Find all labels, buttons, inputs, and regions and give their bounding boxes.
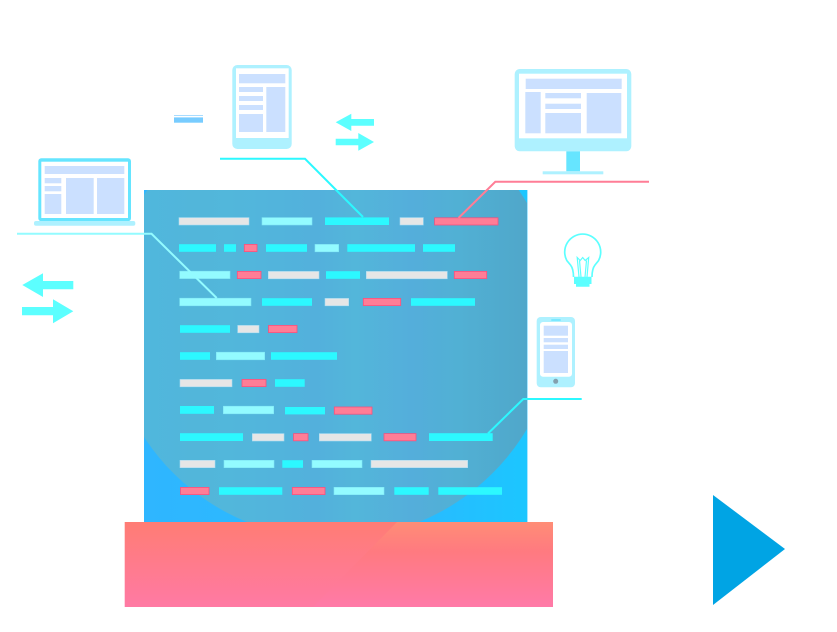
connector: monitor [458,182,649,218]
infographic canvas [17,65,785,607]
icon: arrows near tablet [336,114,374,151]
icon: desktop monitor [515,69,631,174]
icon: arrows near laptop [22,273,73,323]
code row 7 [180,379,305,387]
red base block [125,522,553,607]
play triangle [713,495,785,605]
code row 4 [180,298,475,306]
code row 8 [180,406,372,414]
icon: smartphone [537,317,575,387]
code lines [179,217,502,495]
code row 5 [180,325,297,333]
code row 1 [179,217,498,225]
code row 3 [180,271,487,279]
small dash mark [174,115,203,123]
code row 10 [180,460,468,468]
code row 11 [180,487,502,495]
icon: laptop [34,158,135,226]
panel: code window [144,190,528,522]
connector: phone [488,399,582,434]
code row 9 [180,433,493,441]
connector: laptop [17,234,217,298]
code row 2 [179,244,455,252]
connector: tablet [220,159,363,217]
icon: light bulb [565,234,601,287]
icon: tablet [232,65,292,149]
code row 6 [180,352,337,360]
